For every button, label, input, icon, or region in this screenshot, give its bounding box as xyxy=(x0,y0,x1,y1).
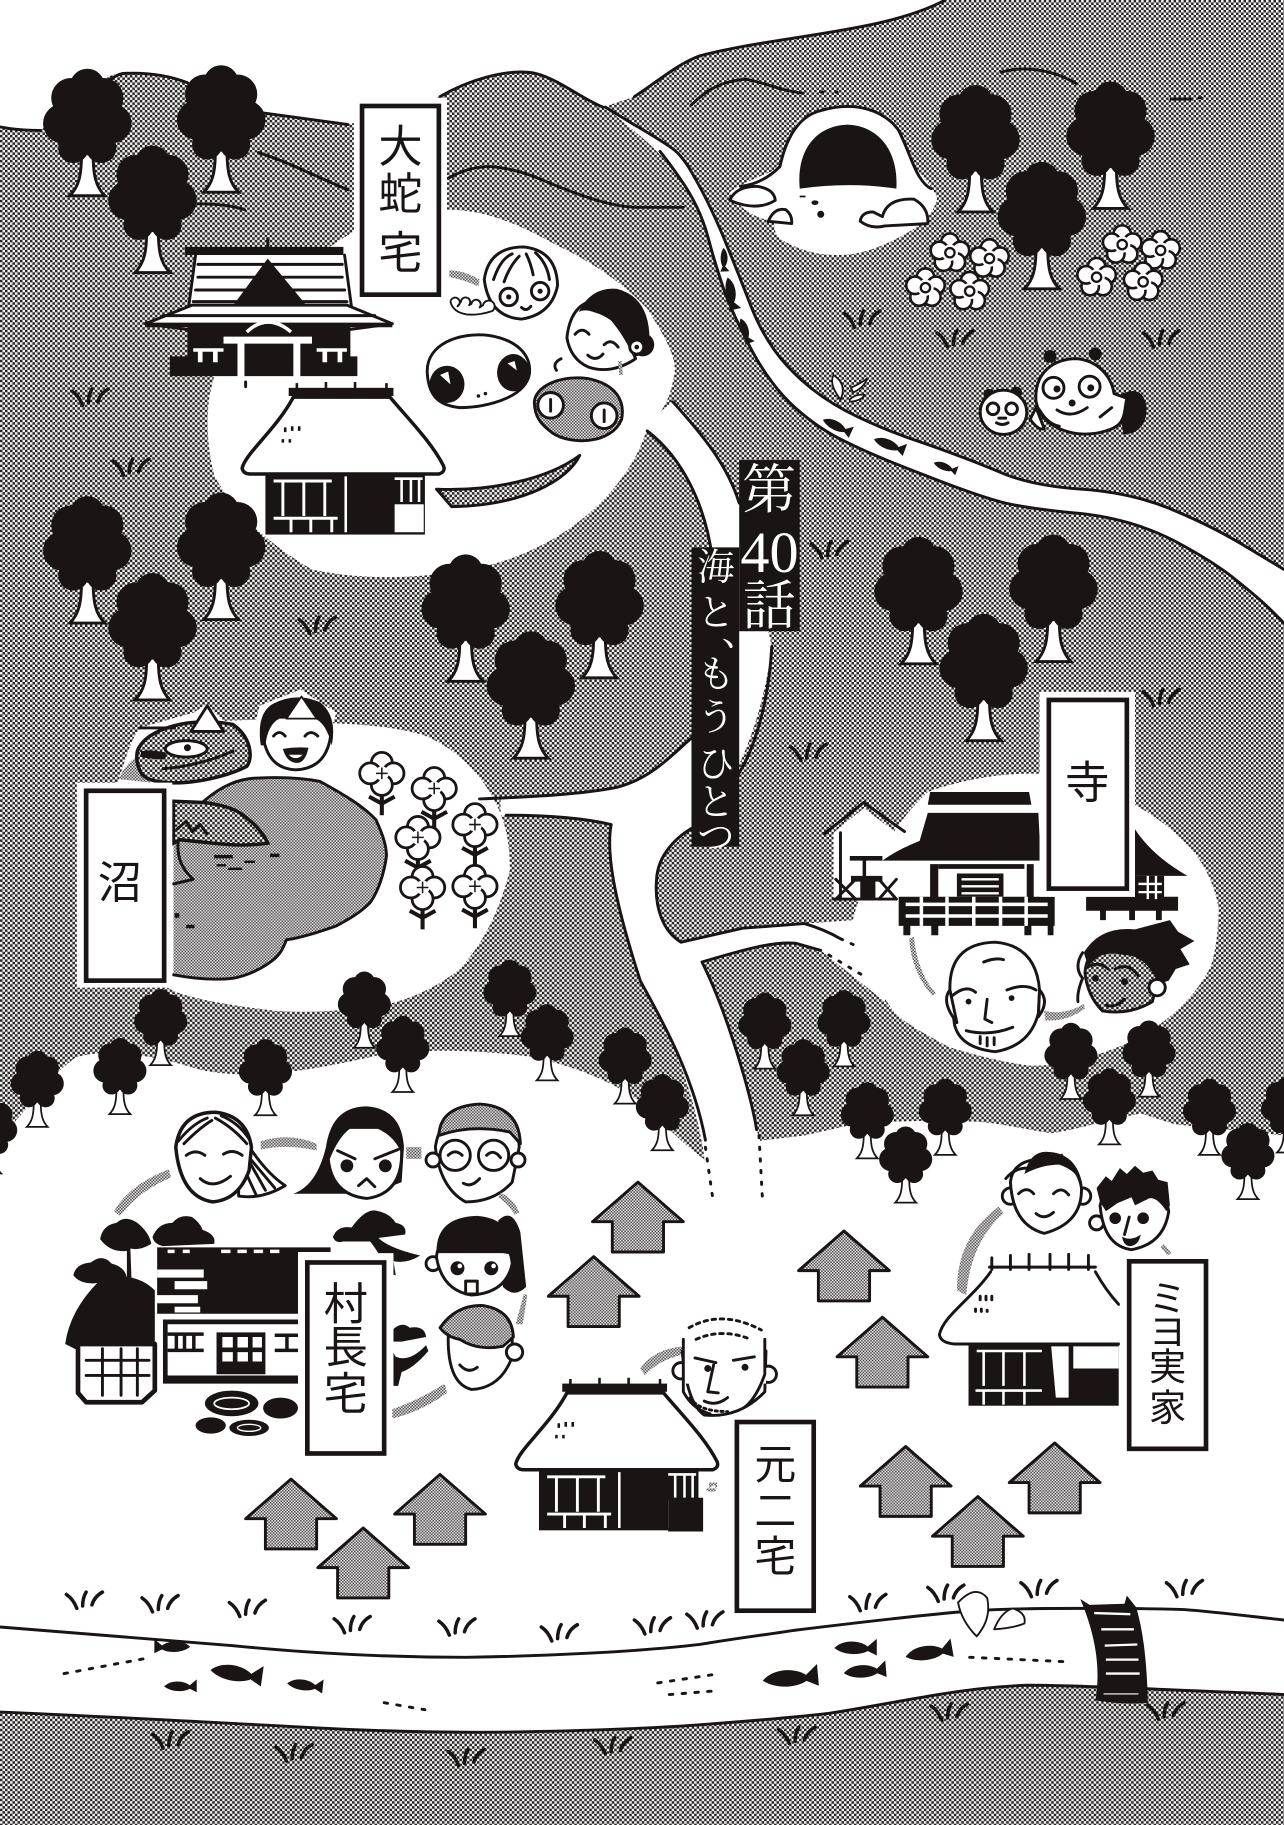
panel: halftone hills xyxy=(0,0,1284,1160)
character: girl with bangs xyxy=(426,1216,526,1295)
label: 沼 xyxy=(77,783,172,988)
grass tufts xyxy=(66,311,1203,1766)
label: 大蛇宅: 大蛇宅 xyxy=(378,123,423,278)
character: stern woman xyxy=(261,1106,421,1198)
label: 沼: 沼 xyxy=(98,859,142,908)
character: monk xyxy=(909,936,1045,1052)
panel: clearing around Orochi house xyxy=(208,210,675,577)
road: central path xyxy=(480,402,908,1200)
building: shrine main hall xyxy=(146,239,392,387)
character: white blob xyxy=(427,335,530,408)
label: ミヨ実家 xyxy=(1120,1252,1215,1457)
character: boy with headband xyxy=(260,696,333,770)
river: upper stream xyxy=(605,107,1284,623)
title: chapter subtitle: 海と、もうひとつ xyxy=(697,548,759,859)
icon: splash xyxy=(832,375,867,402)
label: 村長宅: 村長宅 xyxy=(324,1281,368,1419)
title: chapter number: 40 xyxy=(740,520,799,585)
title: chapter number: 話 xyxy=(743,576,796,636)
panel: cave clearing xyxy=(730,106,937,255)
label: 村長宅 xyxy=(298,1253,393,1462)
icon: splash on lower river xyxy=(958,1592,1025,1636)
arc: swoosh at Orochi xyxy=(437,455,580,507)
panel: clearing around the temple xyxy=(853,774,1219,1066)
building: temple gatehouse xyxy=(824,802,905,899)
river: lower stream xyxy=(0,1608,1284,1732)
label: 元二宅 xyxy=(728,1413,823,1620)
flowers: top right xyxy=(906,225,1180,309)
label: 大蛇宅 xyxy=(354,98,447,303)
trees: large groves xyxy=(43,65,1155,758)
character: frog xyxy=(534,361,623,441)
ripples: dotted water marks xyxy=(64,1657,1071,1710)
fish: lower stream xyxy=(154,1639,954,1693)
trees: pines behind chief's house xyxy=(73,1210,428,1386)
fish: upper stream xyxy=(719,248,959,475)
character: man with glasses and cap xyxy=(426,1104,525,1215)
character: man with topknot xyxy=(1044,920,1194,1021)
panel: bottom halftone ground xyxy=(0,1685,1284,1825)
character: spiky-haired boy xyxy=(1090,1166,1171,1255)
character: bearded old man xyxy=(640,1319,776,1492)
label: ミヨ実家: ミヨ実家 xyxy=(1149,1277,1186,1429)
panel: clearing around the pond xyxy=(104,689,510,1012)
arrows: village houses xyxy=(246,1182,1100,1598)
building: Miyo family house xyxy=(939,1254,1119,1406)
building: thatched house of Orochi xyxy=(242,382,444,535)
label: 寺: 寺 xyxy=(1065,759,1109,808)
trees: small tree line xyxy=(0,960,1284,1203)
character: boy with striped hair xyxy=(392,1294,527,1419)
character: elderly woman xyxy=(114,1112,285,1216)
title: chapter number xyxy=(739,460,800,636)
label: 元二宅: 元二宅 xyxy=(754,1441,796,1580)
panel: ridge lines xyxy=(0,0,1201,210)
title: chapter number: 第 xyxy=(743,460,796,520)
character: smiling man xyxy=(957,1152,1091,1295)
character: braided girl xyxy=(449,247,558,319)
icon: bridge xyxy=(1080,1596,1148,1703)
character: lake monster xyxy=(119,706,250,783)
icon: cave xyxy=(730,107,931,227)
character: smiling woman with bun xyxy=(555,289,654,370)
building: main temple xyxy=(882,792,1055,935)
flowers: clover patch xyxy=(360,752,497,929)
panel: pond xyxy=(173,778,386,979)
building: side temple hall xyxy=(1086,829,1187,920)
label: 寺 xyxy=(1040,692,1135,897)
characters: pandas xyxy=(980,348,1147,434)
building: chief's house xyxy=(65,1247,331,1402)
building: Genji house xyxy=(516,1378,718,1532)
stones xyxy=(196,1391,298,1436)
